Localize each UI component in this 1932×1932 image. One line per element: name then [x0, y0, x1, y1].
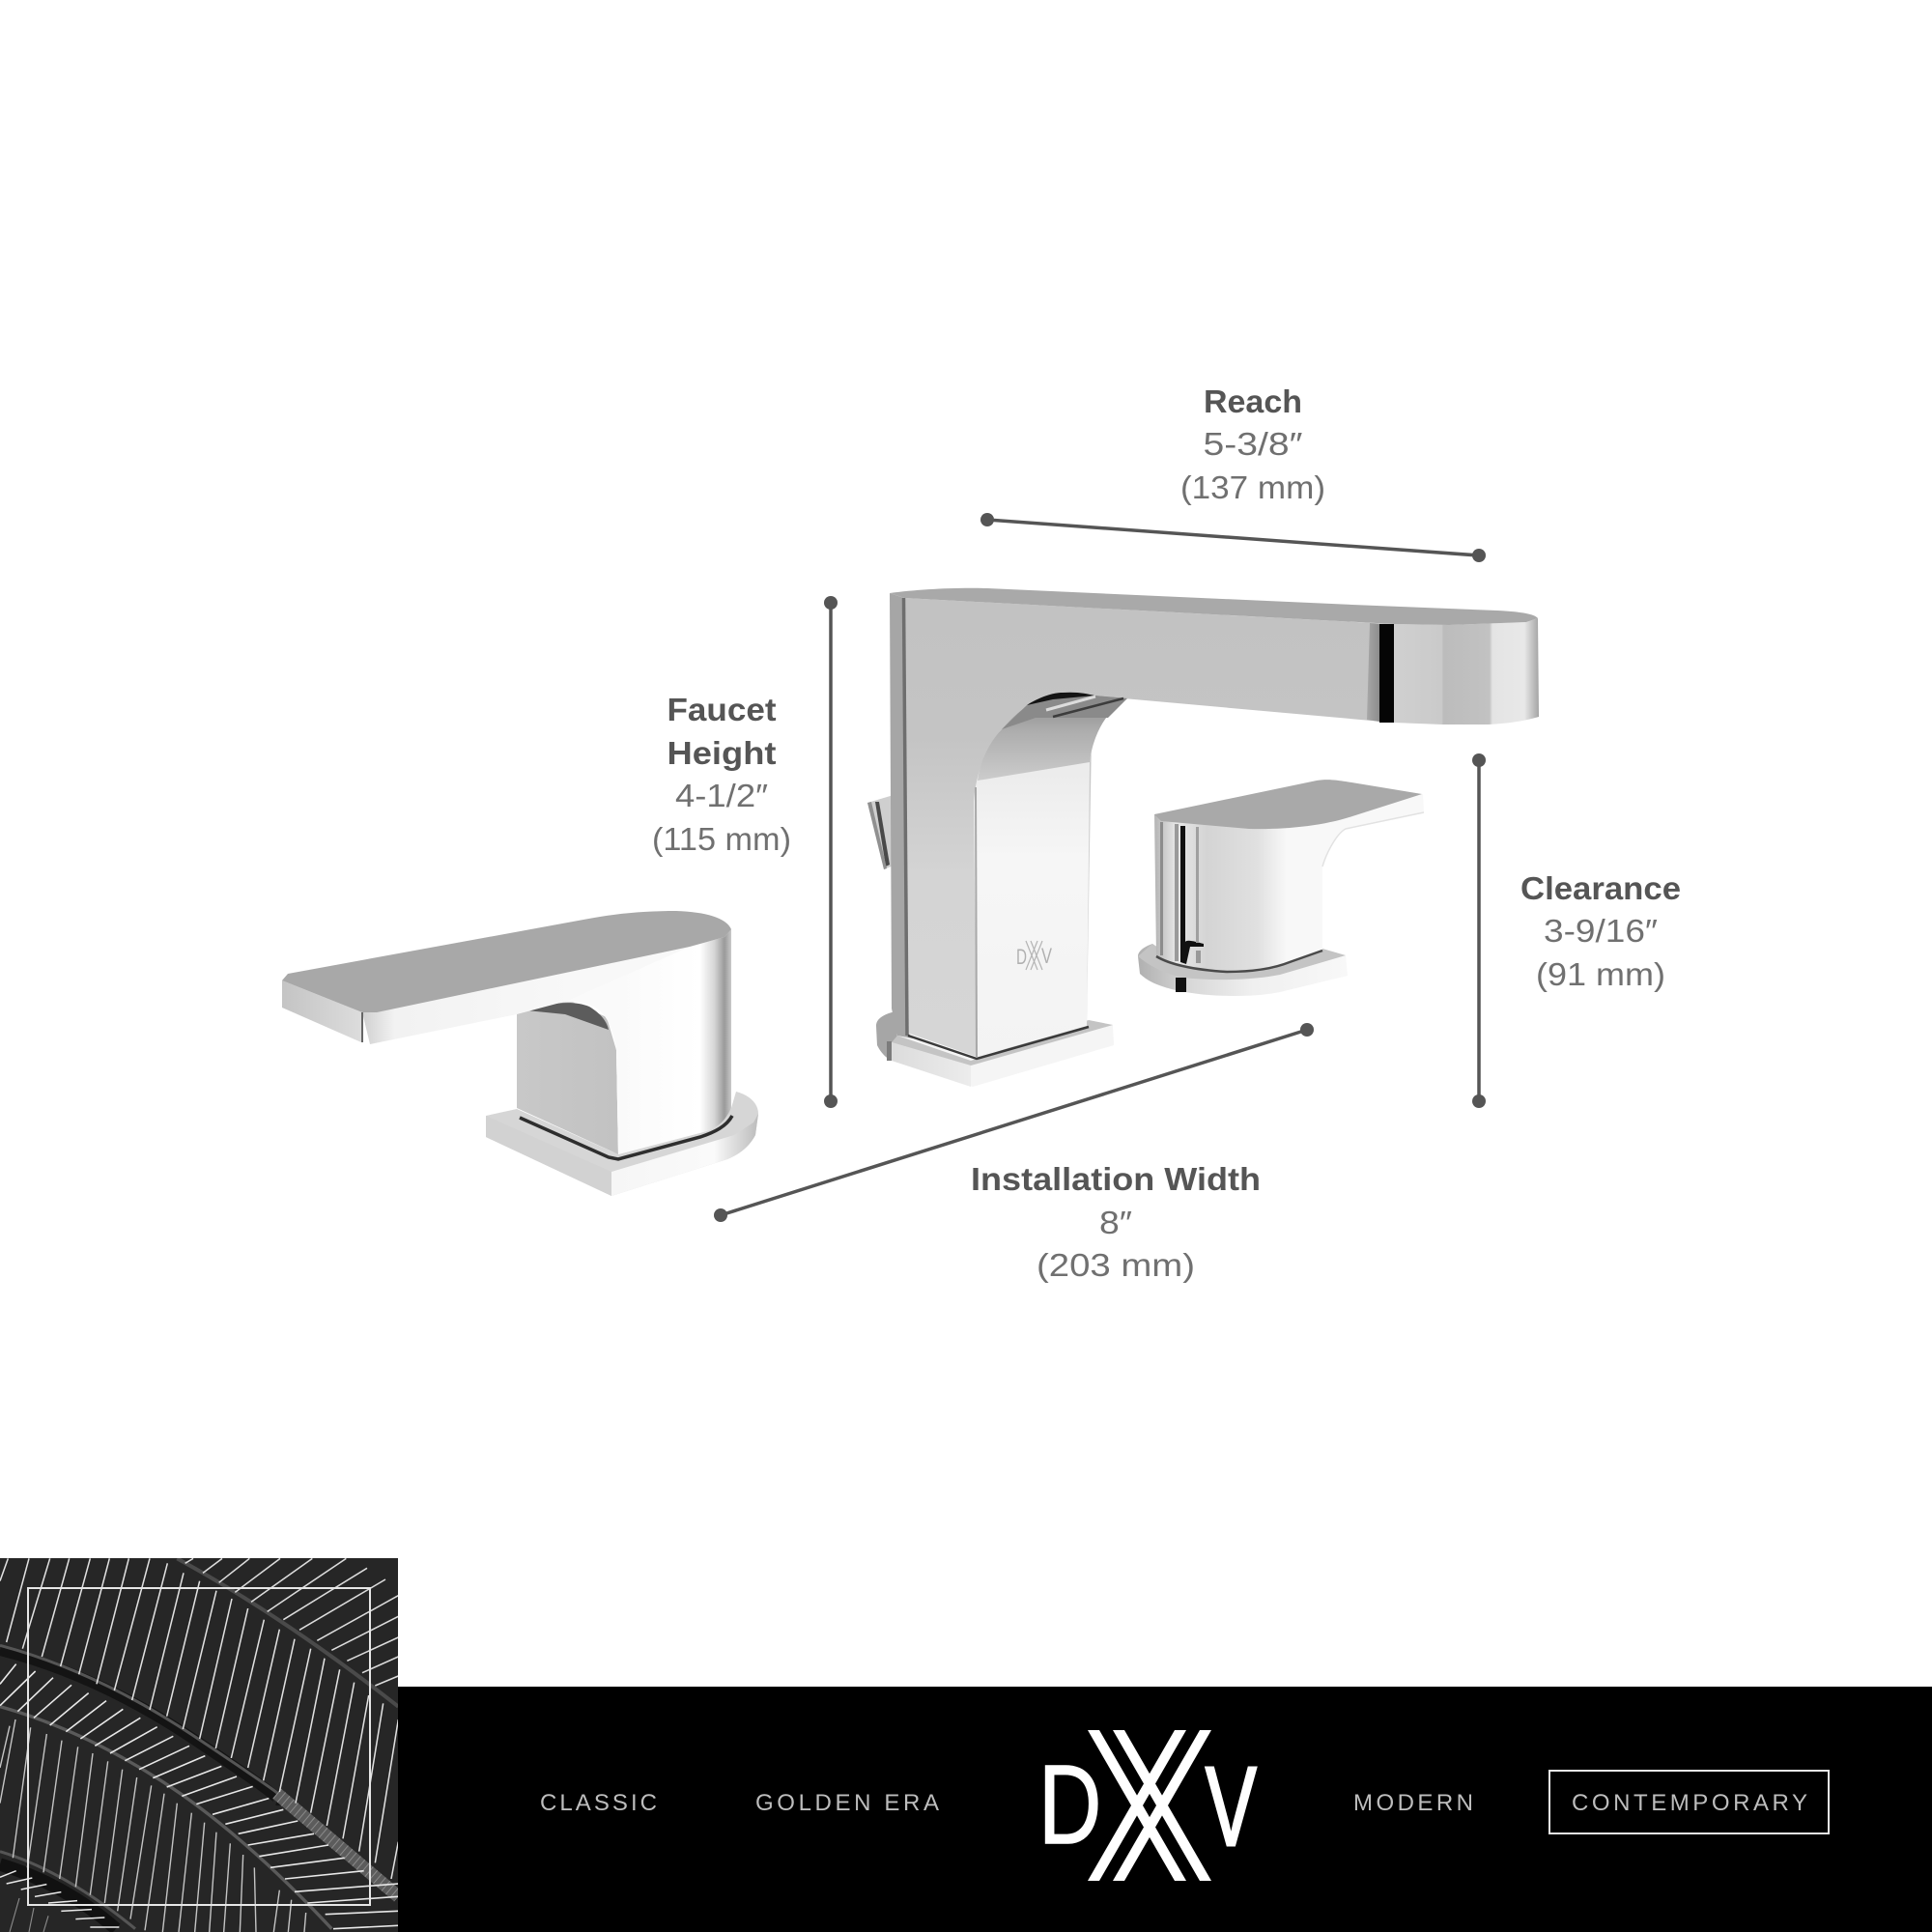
column edge line [976, 787, 977, 1057]
right handle deck plate [1138, 944, 1348, 996]
label: reach: Reach [1204, 384, 1302, 419]
label: faucet height: Height [667, 735, 777, 771]
spout column [974, 693, 1127, 1057]
spout left edge [890, 593, 913, 1038]
faucet: left handle [282, 911, 758, 1196]
engraved DXV logo [1016, 941, 1052, 970]
label: installation width: Installation Width [971, 1161, 1261, 1197]
label: clearance: 3-9/16″ [1544, 913, 1658, 949]
left handle deck plate [486, 1092, 758, 1196]
barbs lower field [0, 1719, 306, 1932]
pop-up drain lever [867, 795, 894, 869]
dimension: faucet height line [824, 596, 838, 1108]
label: installation width [971, 1161, 1261, 1283]
nav: golden era: GOLDEN ERA [755, 1790, 939, 1816]
barbs middle field [0, 1664, 398, 1929]
logo letter D: D [1038, 1743, 1101, 1868]
faucet: right handle [1138, 780, 1424, 996]
nav: contemporary active box: CONTEMPORARY [1572, 1790, 1807, 1816]
barbs bottom corner [10, 1898, 48, 1932]
label: clearance: (91 mm) [1536, 956, 1665, 992]
column reflection [978, 693, 1127, 781]
engraved DXV logo: V [1041, 944, 1052, 968]
spout top surface [890, 588, 1538, 625]
DXV logo [1038, 1730, 1257, 1881]
barbs bottom left field [0, 1871, 119, 1927]
right handle lever edge [1322, 812, 1424, 867]
left handle lever end [282, 980, 362, 1042]
dimension: reach line [980, 513, 1486, 562]
label: reach [1180, 384, 1325, 505]
logo X strokes [1088, 1730, 1211, 1881]
label: installation width: (203 mm) [1037, 1247, 1195, 1283]
right handle body [1154, 794, 1424, 971]
dimension: installation width line [714, 1023, 1314, 1222]
label: faucet height: Faucet [667, 692, 777, 727]
dimension: clearance line [1472, 753, 1486, 1108]
nav: classic: CLASSIC [540, 1790, 657, 1816]
spout end cap [1394, 618, 1539, 724]
right handle top surface [1154, 780, 1422, 829]
nav: contemporary active box [1549, 1771, 1829, 1833]
nav: modern: MODERN [1353, 1790, 1473, 1816]
ribs [0, 1558, 398, 1929]
faucet: centre spout [867, 588, 1539, 1087]
photo: architectural feather ribs [0, 1558, 398, 1932]
label: reach: (137 mm) [1180, 469, 1325, 505]
label: clearance [1520, 870, 1681, 992]
spout black band [1379, 624, 1394, 723]
footer black band [398, 1687, 1932, 1932]
right handle base black mark [1176, 978, 1186, 992]
engraved DXV logo: D [1016, 945, 1027, 969]
label: reach: 5-3/8″ [1204, 426, 1303, 462]
arch shadow detail [1002, 693, 1127, 729]
barbs upper field [0, 1558, 398, 1879]
column bottom shadow [908, 1027, 1089, 1059]
spout main face [904, 598, 1393, 1057]
label: faucet height [652, 692, 791, 857]
right handle vertical reflections [1160, 822, 1204, 964]
left handle gasket [520, 1116, 732, 1159]
left handle inner block [517, 1001, 618, 1154]
barbs top right field [185, 1558, 398, 1686]
label: installation width: 8″ [1099, 1205, 1132, 1240]
label: faucet height: 4-1/2″ [675, 778, 768, 813]
spout wedge reflection [1367, 623, 1379, 722]
right handle gasket [1156, 951, 1322, 972]
label: clearance: Clearance [1520, 870, 1681, 906]
photo inset frame [28, 1588, 370, 1905]
logo letter V: V [1206, 1745, 1257, 1870]
left handle top surface [282, 911, 731, 1012]
label: faucet height: (115 mm) [652, 821, 791, 857]
spout deck plate [876, 1011, 1114, 1087]
left handle arch [526, 1003, 609, 1030]
left handle body [362, 929, 731, 1154]
